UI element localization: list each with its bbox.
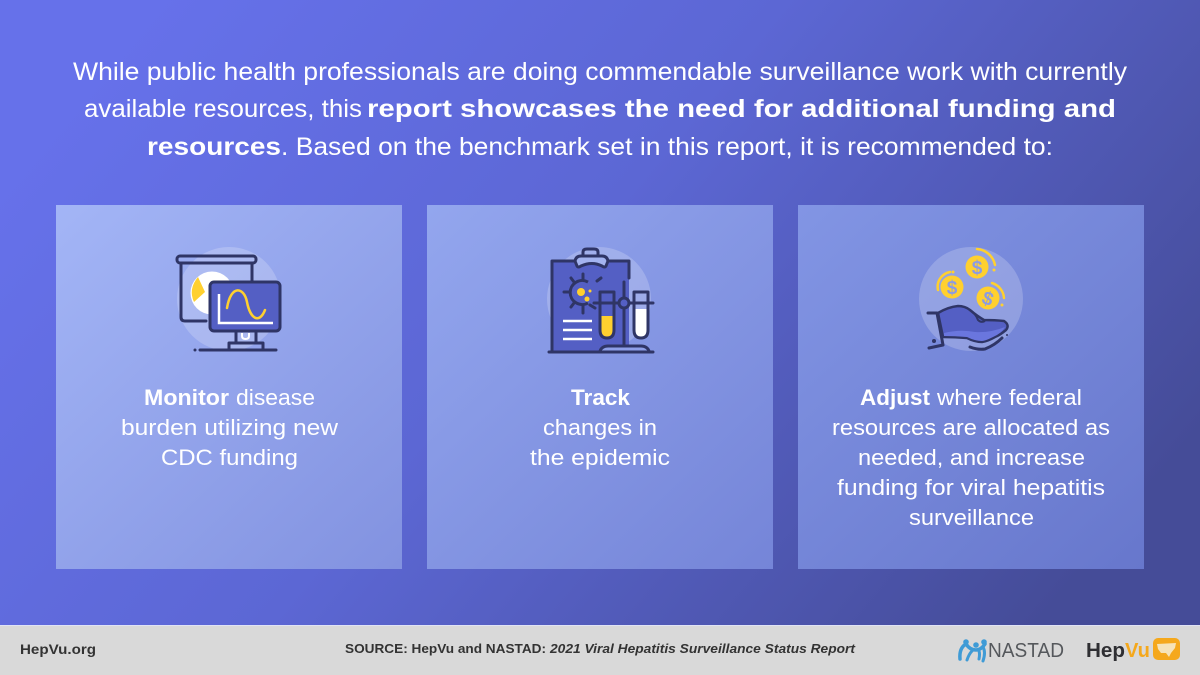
icon: hand with coins: $	[979, 288, 996, 311]
panel text: the epidemic	[530, 445, 670, 470]
panel text: resources are allocated as	[832, 415, 1110, 440]
intro text: While public health professionals are doing commendable surveillance work with currently	[73, 58, 1128, 86]
intro text: available resources, this	[84, 95, 362, 123]
panel text: Monitor	[144, 385, 229, 410]
icon: clipboard, virus and test tubes	[547, 247, 653, 352]
logo: HepVu: Hep	[1086, 640, 1125, 662]
panel text: CDC funding	[161, 445, 298, 470]
intro text: . Based on the benchmark set in this report, it is recommended to:	[281, 133, 1053, 161]
icon: hand with coins: $	[972, 258, 983, 279]
source: SOURCE: HepVu and NASTAD:	[345, 642, 546, 656]
panel text: Adjust	[860, 385, 931, 410]
panel text: burden utilizing new	[121, 415, 339, 440]
footer bar	[0, 625, 1200, 675]
panel text	[121, 385, 339, 470]
panel text: funding for viral hepatitis	[837, 475, 1105, 500]
panel: monitor	[56, 205, 402, 569]
intro text	[73, 58, 1128, 161]
panel text: needed, and increase	[858, 445, 1085, 470]
panel text: changes in	[543, 415, 657, 440]
source	[345, 642, 856, 656]
logo: HepVu	[1086, 638, 1180, 662]
website label: HepVu.org	[20, 641, 96, 657]
icon: presentation board and monitor	[177, 247, 281, 352]
intro text: resources	[147, 133, 281, 161]
logo: NASTAD: NASTAD	[988, 640, 1064, 662]
panel text	[530, 385, 670, 470]
source: 2021 Viral Hepatitis Surveillance Status Report	[549, 642, 856, 656]
panel text: where federal	[936, 385, 1082, 410]
icon: hand with coins: $	[947, 278, 958, 299]
panel text: Track	[571, 385, 630, 410]
intro text: report showcases the need for additional funding and	[367, 95, 1116, 123]
logo: HepVu: Vu	[1125, 640, 1150, 662]
panel: adjust	[798, 205, 1144, 569]
panel text: disease	[236, 385, 315, 410]
logo: NASTAD	[960, 639, 1064, 662]
icon: hand with coins	[919, 247, 1023, 351]
panel text: surveillance	[909, 505, 1034, 530]
panel text	[832, 385, 1110, 530]
panel: track	[427, 205, 773, 569]
